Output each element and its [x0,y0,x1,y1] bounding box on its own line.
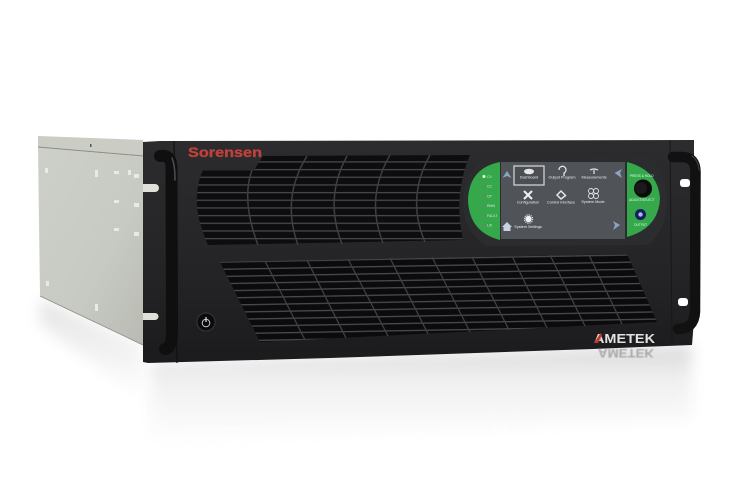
dashboard selection box [514,166,544,185]
touchscreen: System Settings [514,225,542,229]
icon: system mode [588,188,598,198]
touchscreen [501,162,625,239]
green left indicator panel: CC [487,184,493,188]
icon: configuration [524,191,532,199]
icon: home [502,222,512,231]
left handle [160,156,175,349]
left slots [143,184,159,320]
lower vent [220,254,657,342]
green left indicator panel: FAULT [487,214,498,218]
right slots [678,179,690,306]
reflection on the floor [40,298,692,445]
icon: system settings gear [524,215,533,223]
green right control panel: ADJUST/SELECT [629,198,655,202]
green right control panel: OUTPUT [634,223,647,227]
nav arrow: forward [613,221,620,230]
logo: AMETEK: AMETEK [594,331,656,346]
chassis: top surface [38,136,143,157]
icon: dashboard [524,169,534,174]
nav arrow: back [614,169,622,178]
logo: Sorensen: Sorensen [188,145,262,160]
green left indicator panel: RMN [487,204,495,208]
chassis: side wall [38,144,143,345]
control display bezel [463,157,667,246]
green left indicator panel: CP [487,194,493,198]
knob [634,180,652,198]
upper fan vent [197,155,470,245]
touchscreen: System Mode [581,200,605,204]
icon: measurements [590,169,598,174]
green right control panel: PRESS & HOLD [630,174,654,178]
icon: control interface [557,191,566,199]
reflected logo: AMETEK [598,346,654,360]
touchscreen: Measurements [581,176,607,180]
icon: output program [559,166,566,176]
power button [197,313,215,331]
touchscreen: Output Program [548,176,576,180]
front panel [143,140,694,363]
green left indicator panel [468,162,500,240]
green right control panel [627,162,660,237]
output button [635,209,646,220]
touchscreen: Dashboard [520,176,538,180]
touchscreen: Configuration [517,200,539,204]
green left indicator panel: CV [487,175,493,179]
touchscreen: Control Interface [547,200,575,204]
nav arrow: up [502,171,512,178]
green left indicator panel: LXI [487,224,492,228]
right handle [673,156,699,329]
